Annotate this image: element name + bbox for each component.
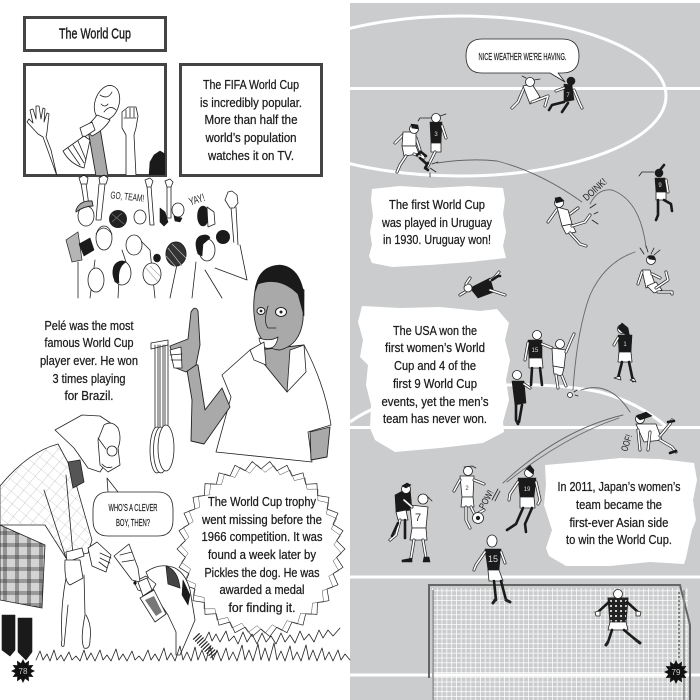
text: USA on torn paper: first women’s World — [385, 341, 485, 355]
icon: raised open hand — [27, 106, 57, 176]
ball and spark — [568, 390, 578, 398]
bush frame — [176, 461, 346, 637]
speech bubble: clever boy: BOY, THEN? — [116, 518, 150, 529]
tackling players — [395, 114, 446, 177]
text: USA on torn paper: Cup and 4 of the — [394, 359, 476, 373]
title box: The World Cup — [59, 26, 131, 42]
player in black 9: 9 — [658, 183, 662, 189]
panel: popularity text: watches it on TV. — [207, 149, 294, 163]
text: USA on torn paper: The USA won the — [393, 324, 477, 338]
sitting players — [512, 76, 582, 112]
player in black 15 by goal — [474, 535, 510, 603]
text: Pele: for Brazil. — [64, 389, 114, 403]
panel: trophy illustration — [24, 64, 166, 176]
text: USA on torn paper: first 9 World Cup — [393, 377, 477, 391]
icon: world cup trophy held up — [63, 82, 124, 176]
player in black 9 — [639, 165, 672, 220]
speech bubble: nice weather: NICE WEATHER WE’RE HAVING. — [478, 52, 566, 63]
panel: popularity text: The FIFA World Cup — [203, 78, 299, 92]
page number 79: 79 — [672, 668, 681, 677]
page number 78: 78 — [19, 667, 28, 676]
text: oof: OOF! — [619, 433, 635, 453]
goalkeeper — [595, 590, 641, 645]
player in black far right: 1 — [623, 342, 627, 348]
icon: medals on ribbons — [150, 340, 174, 473]
fallen player — [460, 272, 505, 298]
panel: popularity text — [180, 64, 322, 176]
player in black 15: 15 — [532, 348, 539, 354]
text: trophy story: awarded a medal — [220, 583, 304, 597]
icon: Jules Rimet trophy — [114, 544, 166, 622]
icon: dog leash — [61, 575, 90, 648]
player falling over — [636, 412, 676, 453]
icon: raised fist — [122, 107, 138, 176]
pair of jostling players — [390, 483, 432, 562]
panel: popularity text: world’s population — [205, 131, 297, 145]
player in black 19 — [507, 465, 540, 532]
ball flight lines — [437, 160, 646, 483]
tackling players: 3 — [434, 132, 438, 138]
player number 2 kicking ball — [454, 466, 484, 528]
player number 2 kicking ball: 2 — [465, 486, 469, 492]
text: Japan on torn paper — [544, 458, 697, 566]
crowd of fans illustration — [66, 175, 247, 298]
text: trophy story: The World Cup trophy — [208, 495, 317, 509]
page number 78 — [11, 659, 35, 683]
player in black far right — [614, 323, 636, 382]
referee in black — [512, 370, 530, 424]
player jumping in white — [552, 334, 574, 388]
text: trophy story: found a week later by — [208, 548, 317, 562]
text: Japan on torn paper: first-ever Asian side — [570, 516, 669, 530]
text: Japan on torn paper: In 2011, Japan’s women’s — [558, 480, 680, 494]
player hit by ball — [638, 246, 672, 294]
football — [472, 489, 500, 524]
page number 79 — [664, 660, 688, 684]
player in black 19: 19 — [524, 487, 531, 493]
text: trophy story: Pickles the dog. He was — [204, 566, 320, 580]
text: first world cup on torn paper: in 1930. Uruguay won! — [383, 233, 491, 247]
panel: popularity text: is incredibly popular. — [200, 96, 302, 110]
pair of jostling players: 7 — [415, 512, 421, 524]
left page background — [0, 0, 350, 700]
player in black 15 by goal: 15 — [488, 554, 498, 564]
pitch markings — [350, 14, 700, 676]
text: Pele: 3 times playing — [52, 372, 126, 386]
speech bubble: clever boy — [93, 478, 173, 536]
text: Pele — [40, 319, 138, 403]
title box — [24, 18, 166, 50]
text: trophy story: 1966 competition. It was — [202, 530, 322, 544]
text: yay: YAY! — [188, 192, 207, 208]
text: pow: POW! — [477, 488, 496, 511]
text: Pele: Pelé was the most — [44, 319, 134, 333]
grass strip — [36, 628, 350, 661]
speech bubble: clever boy: WHO’S A CLEVER — [108, 503, 158, 514]
right page pitch background — [350, 3, 700, 700]
speech bubble: nice weather — [466, 39, 579, 82]
icon: spectator hair — [149, 151, 165, 176]
Pele illustration with medals — [150, 265, 331, 473]
dog with trophy illustration — [114, 544, 195, 655]
text: go team: GO, TEAM! — [110, 190, 145, 205]
player flying after being hit — [548, 197, 598, 246]
text: Pele: player ever. He won — [40, 354, 138, 368]
text: doink: DOINK! — [581, 177, 609, 204]
panel: popularity text: More than half the — [204, 113, 298, 127]
text: trophy story: went missing before the — [201, 513, 322, 527]
text: USA on torn paper: events, yet the men’s — [382, 395, 488, 409]
text: first world cup on torn paper: was played in Uruguay — [381, 216, 493, 230]
text: Japan on torn paper: team became the — [576, 498, 662, 512]
text: trophy story — [201, 495, 322, 615]
text: USA on torn paper: team has never won. — [383, 412, 487, 426]
sitting players: 7 — [566, 93, 570, 99]
text: first world cup on torn paper: The first World Cup — [389, 198, 485, 212]
player in black 15 — [525, 330, 552, 385]
text: trophy story: for finding it. — [228, 601, 296, 615]
text: first world cup on torn paper — [369, 186, 506, 267]
text: Japan on torn paper: to win the World Cup. — [566, 533, 672, 547]
old woman illustration — [0, 415, 120, 660]
goal and net — [429, 585, 690, 700]
text: Pele: famous World Cup — [44, 336, 134, 350]
text: USA on torn paper — [358, 306, 510, 452]
